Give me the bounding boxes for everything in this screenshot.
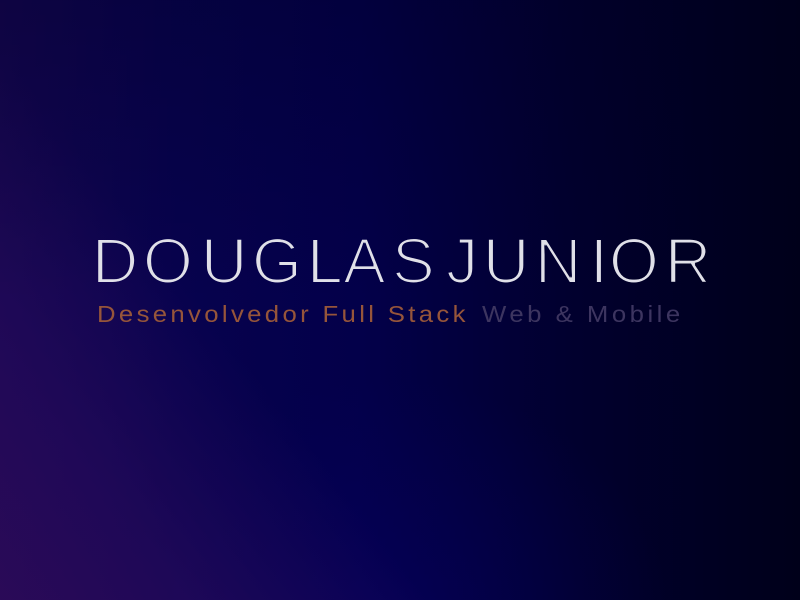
- subtitle: platforms: Web & Mobile: [482, 302, 680, 328]
- title: name: DOUGLAS JUNIOR: [92, 225, 711, 297]
- subtitle: role: Desenvolvedor Full Stack: [97, 302, 466, 328]
